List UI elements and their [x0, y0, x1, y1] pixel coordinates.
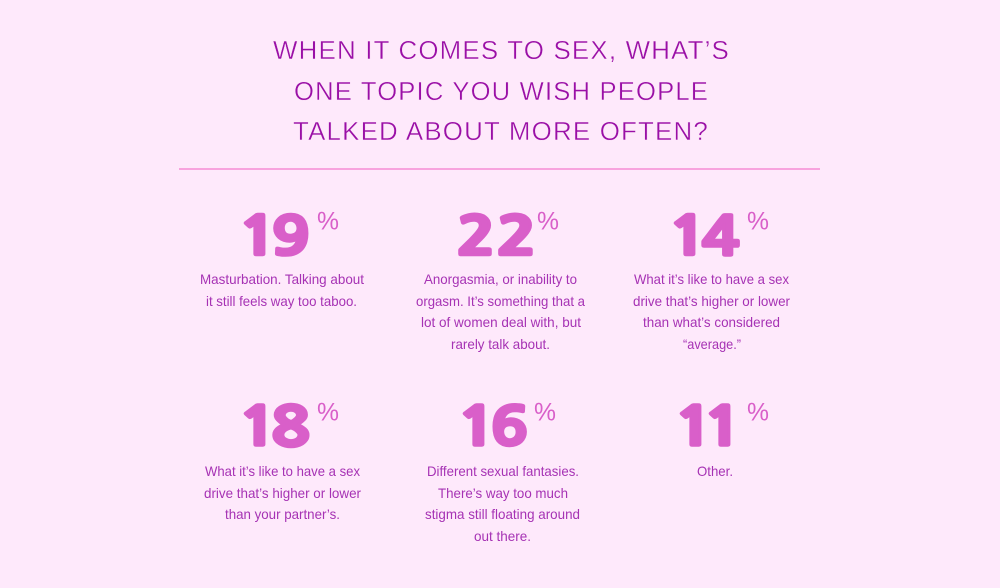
- stat: 22% anorgasmia: rarely talk about.: [451, 336, 550, 352]
- stat: 22% anorgasmia: 2: [456, 210, 496, 263]
- stat: 19% masturbation: %: [317, 208, 339, 236]
- stat: 19% masturbation: 1: [238, 210, 278, 263]
- stat: 14% sex drive vs average: 1: [668, 210, 708, 263]
- stat: 19% masturbation: it still feels way too taboo.: [206, 293, 357, 309]
- stat: 11% other: [674, 398, 769, 479]
- stat: 16% sexual fantasies: Different sexual fantasies.: [427, 463, 579, 479]
- stat: 22% anorgasmia: orgasm. It’s something that a: [416, 293, 585, 309]
- stat: 16% sexual fantasies: There’s way too much: [438, 485, 568, 501]
- stat: 18% sex drive vs partner: What it’s like to have a sex: [205, 463, 360, 479]
- stat: 16% sexual fantasies: 6: [490, 400, 528, 453]
- stat: 11% other: Other.: [697, 463, 733, 479]
- stat: 22% anorgasmia: 2: [496, 210, 537, 263]
- stat: 18% sex drive vs partner: 1: [238, 400, 278, 453]
- stat: 18% sex drive vs partner: [204, 398, 361, 522]
- stat: 14% sex drive vs average: [633, 208, 790, 352]
- stat: 16% sexual fantasies: stigma still floating around: [425, 506, 580, 522]
- stat: 14% sex drive vs average: %: [747, 208, 769, 236]
- title: WHEN IT COMES TO SEX, WHAT’S: [273, 35, 730, 65]
- stat: 11% other: 1: [674, 400, 714, 453]
- stat: 22% anorgasmia: lot of women deal with, but: [421, 314, 581, 330]
- stat: 18% sex drive vs partner: %: [317, 398, 339, 426]
- stat: 14% sex drive vs average: “average.”: [683, 336, 741, 352]
- title: [273, 35, 730, 146]
- stat: 18% sex drive vs partner: than your partner’s.: [225, 506, 340, 522]
- stat: 14% sex drive vs average: What it’s like to have a sex: [634, 271, 789, 287]
- stat: 11% other: %: [747, 398, 769, 426]
- stat: 14% sex drive vs average: than what’s considered: [643, 314, 780, 330]
- stat: 14% sex drive vs average: 4: [701, 210, 740, 263]
- stat: 18% sex drive vs partner: 8: [271, 400, 310, 453]
- stat: 14% sex drive vs average: drive that’s higher or lower: [633, 293, 790, 309]
- stat: 19% masturbation: Masturbation. Talking about: [200, 271, 364, 287]
- title: TALKED ABOUT MORE OFTEN?: [293, 116, 709, 146]
- stat: 16% sexual fantasies: %: [534, 398, 556, 426]
- title: ONE TOPIC YOU WISH PEOPLE: [294, 76, 709, 106]
- stat: 19% masturbation: 9: [271, 210, 310, 263]
- stat: 16% sexual fantasies: 1: [457, 400, 497, 453]
- stat: 19% masturbation: [200, 208, 364, 309]
- stat: 16% sexual fantasies: out there.: [474, 528, 531, 544]
- stat: 18% sex drive vs partner: drive that’s higher or lower: [204, 485, 361, 501]
- stat: 16% sexual fantasies: [425, 398, 580, 544]
- stat: 22% anorgasmia: %: [537, 208, 559, 236]
- stat: 11% other: 1: [703, 400, 743, 453]
- stat: 22% anorgasmia: [416, 208, 585, 352]
- stat: 22% anorgasmia: Anorgasmia, or inability to: [424, 271, 577, 287]
